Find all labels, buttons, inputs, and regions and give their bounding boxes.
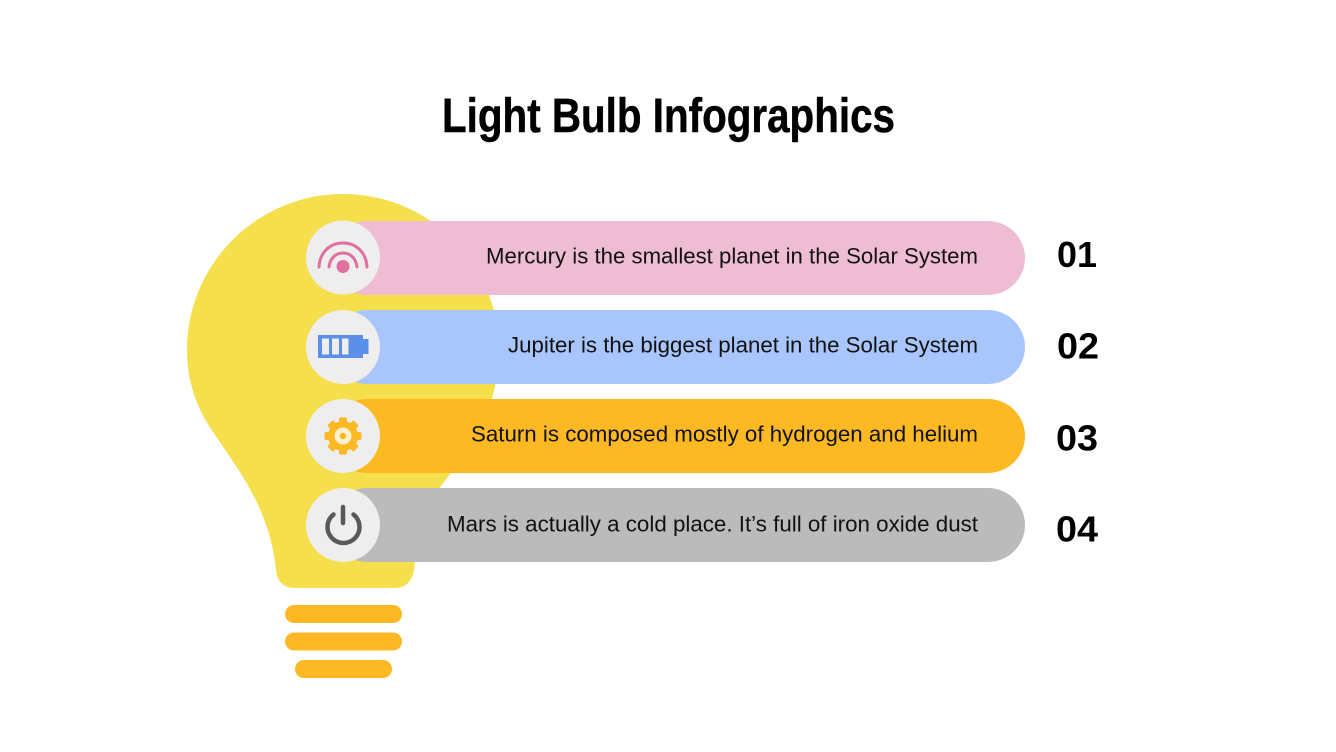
icon: power: [306, 488, 380, 562]
icon: gear: [306, 399, 380, 473]
light bulb: [187, 194, 499, 678]
text: Saturn is composed mostly of hydrogen and helium: [471, 422, 978, 446]
pill: [330, 399, 1025, 473]
icon: battery: [306, 310, 380, 384]
row 04: Mars: [306, 488, 1099, 562]
text: Mars is actually a cold place. It’s full of iron oxide dust: [447, 512, 978, 536]
number: 01: [1057, 234, 1097, 275]
pill: [330, 310, 1025, 384]
bulb glass: [187, 194, 499, 588]
title: Light Bulb Infographics: [442, 90, 895, 143]
number: 02: [1057, 326, 1099, 366]
row 03: Saturn: [306, 399, 1098, 473]
number: 03: [1056, 418, 1098, 458]
bulb base: [285, 605, 402, 678]
row 01: Mercury: [306, 220, 1097, 295]
row 02: Jupiter: [306, 310, 1099, 384]
number: 04: [1056, 508, 1099, 550]
pill: [330, 488, 1025, 562]
text: Mercury is the smallest planet in the Solar System: [486, 244, 978, 268]
pill: [330, 221, 1025, 295]
icon: signal: [306, 220, 380, 294]
text: Jupiter is the biggest planet in the Solar System: [508, 332, 978, 358]
